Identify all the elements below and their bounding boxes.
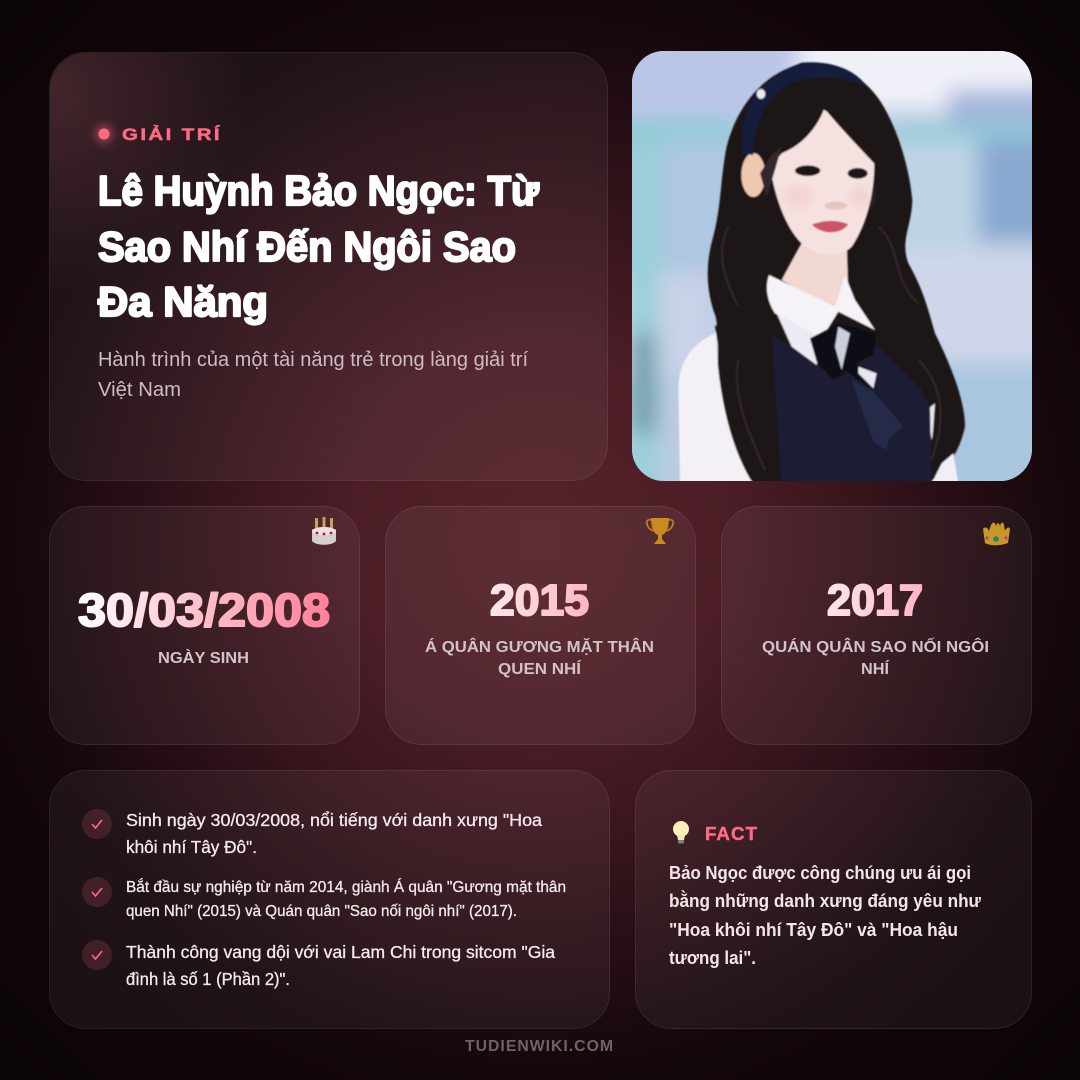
hair over sleeve [714, 324, 720, 344]
headband [742, 62, 868, 155]
fact heading: FACT [705, 824, 758, 844]
icon: light bulb [673, 821, 689, 844]
icon: birthday cake [312, 517, 336, 545]
stat label [425, 637, 654, 678]
panel: hero title card [50, 52, 608, 480]
subtitle: Hành trình của một tài năng trẻ trong làng giải trí [98, 349, 528, 371]
neck [782, 243, 848, 313]
stat label [762, 636, 989, 678]
collar [767, 275, 875, 338]
title: Lê Huỳnh Bảo Ngọc: Từ [98, 167, 540, 214]
bangs [782, 107, 876, 164]
list item 1: Sinh ngày 30/03/2008, nổi tiếng với danh xưng "Hoa [126, 810, 542, 830]
icon: crown [983, 522, 1010, 545]
subtitle [98, 349, 528, 401]
ribbon [852, 380, 903, 450]
panel: portrait photo [632, 51, 1032, 481]
subtitle: Việt Nam [98, 379, 181, 401]
list item 2: Bắt đầu sự nghiệp từ năm 2014, giành Á quân "Gương mặt thân [126, 877, 566, 896]
hair back [708, 63, 965, 487]
blush [785, 187, 812, 206]
stat label: NHÍ [861, 659, 890, 678]
title: Sao Nhí Đến Ngôi Sao [98, 223, 516, 270]
stat label: QUÁN QUÂN SAO NỐI NGÔI [762, 636, 989, 656]
stat label: Á QUÂN GƯƠNG MẶT THÂN [425, 637, 654, 656]
fact text: bằng những danh xưng đáng yêu như [669, 890, 982, 911]
list item 2: quen Nhí" (2015) và Quán quân "Sao nối ngôi nhí" (2017). [126, 903, 517, 920]
category tag: GIẢI TRÍ [122, 125, 222, 144]
stat value: 2017 [827, 576, 923, 625]
list item 1 [82, 809, 542, 857]
watermark: TUDIENWIKI.COM [465, 1038, 614, 1055]
stat label: QUEN NHÍ [498, 659, 582, 678]
list item 3: Thành công vang dội với vai Lam Chi trong sitcom "Gia [126, 942, 555, 962]
fact text: Bảo Ngọc được công chúng ưu ái gọi [669, 863, 971, 883]
title [98, 167, 540, 325]
title: Đa Năng [98, 278, 268, 325]
nose shadow [824, 202, 847, 210]
bow [810, 323, 878, 390]
face [770, 108, 874, 255]
list item 3: đình là số 1 (Phần 2)". [126, 969, 290, 989]
vest [772, 333, 932, 487]
fact text: tương lai". [669, 948, 756, 968]
panel: key points list [50, 770, 610, 1028]
fact text: "Hoa khôi nhí Tây Đô" và "Hoa hậu [669, 920, 958, 940]
list item 2 [82, 877, 566, 920]
list item 3 [82, 940, 555, 989]
lips [812, 221, 848, 232]
stat value: 30/03/2008 [78, 584, 330, 636]
hair highlights [722, 227, 940, 470]
person [678, 62, 965, 487]
category tag [96, 125, 222, 144]
stat label: NGÀY SINH [158, 648, 249, 667]
sleeve [678, 333, 755, 487]
eyes [795, 165, 820, 176]
panel: fact [636, 770, 1032, 1028]
panel: stat 2015 [386, 506, 696, 744]
icon: trophy [647, 518, 673, 544]
panel: stat birth date [50, 506, 360, 744]
panel: stat 2017 [722, 506, 1032, 744]
fact text [669, 863, 982, 968]
list item 1: khôi nhí Tây Đô". [126, 837, 257, 857]
stat value: 2015 [490, 576, 589, 625]
photo background blur [632, 51, 1032, 481]
ear [741, 153, 765, 197]
